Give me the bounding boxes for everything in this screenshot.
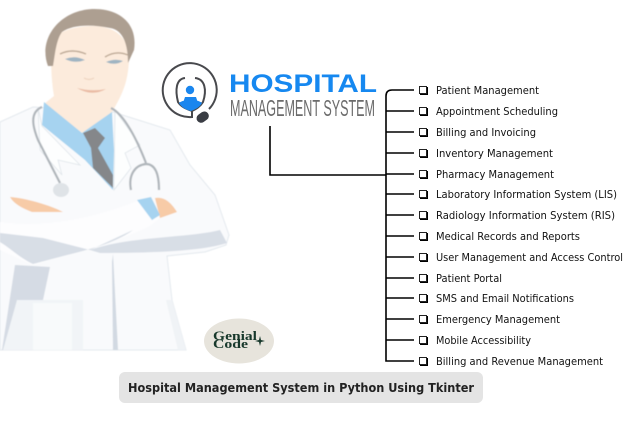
brand badge: Genial Code <box>204 318 274 364</box>
feature list: Billing and Revenue Management <box>436 355 603 368</box>
doctor coat <box>0 107 229 350</box>
checkboxes <box>420 86 426 364</box>
title banner <box>119 372 483 403</box>
logo <box>163 63 377 125</box>
feature list: Appointment Scheduling <box>436 105 558 118</box>
feature list: Pharmacy Management <box>436 168 554 181</box>
feature list: SMS and Email Notifications <box>436 292 574 305</box>
feature list <box>420 84 623 368</box>
illustration: doctor <box>0 9 229 350</box>
checkbox shadows <box>420 87 428 366</box>
feature list: Billing and Invoicing <box>436 126 536 139</box>
doctor nose <box>84 78 94 80</box>
feature list: Medical Records and Reports <box>436 230 580 243</box>
brand badge: Genial Code: Genial <box>213 328 257 343</box>
logo icon: stethoscope <box>163 63 217 125</box>
doctor eyes <box>65 57 85 62</box>
brand badge: Genial Code: Code <box>213 336 248 351</box>
feature list: Laboratory Information System (LIS) <box>436 188 617 201</box>
doctor lapels <box>38 108 80 175</box>
doctor hair <box>45 9 135 66</box>
connector lines <box>270 90 414 361</box>
doctor cuff <box>137 197 160 220</box>
feature list: Mobile Accessibility <box>436 334 532 347</box>
feature list: Emergency Management <box>436 313 560 326</box>
doctor stethoscope <box>33 107 159 190</box>
doctor lower coat shading <box>2 265 50 350</box>
doctor face and neck <box>44 26 129 135</box>
title banner: Hospital Management System in Python Using Tkinter <box>128 381 474 395</box>
feature list: Inventory Management <box>436 147 553 160</box>
feature list: Patient Portal <box>436 272 502 285</box>
doctor shirt <box>42 102 114 190</box>
doctor tie <box>83 128 113 188</box>
logo wordmark: management system: MANAGEMENT SYSTEM <box>230 95 375 121</box>
doctor arms <box>0 201 160 265</box>
feature list: Patient Management <box>436 84 539 97</box>
feature list: Radiology Information System (RIS) <box>436 209 615 222</box>
doctor mouth <box>77 88 106 93</box>
logo wordmark: hospital: HOSPITAL <box>229 70 377 98</box>
doctor hands <box>10 197 63 212</box>
doctor stethoscope chest piece <box>53 183 69 197</box>
